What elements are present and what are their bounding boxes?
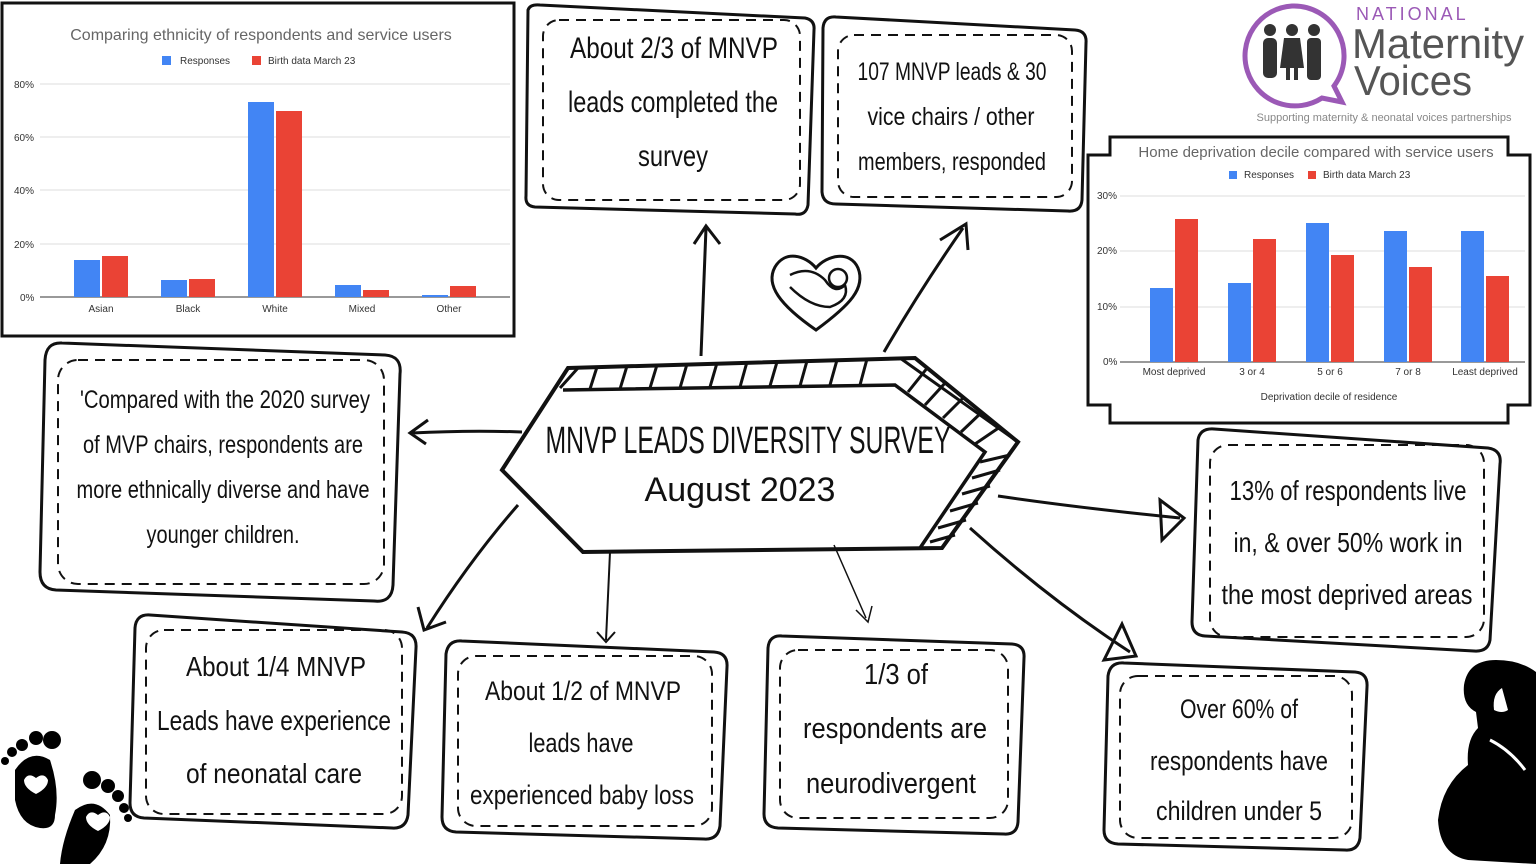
arrows bbox=[410, 224, 1184, 660]
box: 1/4 neonatal: of neonatal care bbox=[186, 758, 362, 789]
chart: ethnicity: Asian bbox=[88, 304, 114, 315]
box: 1/4 neonatal: Leads have experience bbox=[157, 705, 391, 736]
box: 107 leads: 107 MNVP leads & 30 bbox=[858, 58, 1046, 86]
chart: deprivation: Responses bbox=[1244, 170, 1294, 181]
box: 1/3 neurodivergent: 1/3 of bbox=[864, 659, 929, 691]
chart: deprivation: 0% bbox=[1103, 357, 1118, 368]
box: compared with 2020 bbox=[40, 343, 400, 601]
chart: ethnicity: 40% bbox=[14, 186, 34, 197]
chart: deprivation: Birth data March 23 bbox=[1323, 170, 1411, 181]
box: 2/3 completed: About 2/3 of MNVP bbox=[570, 32, 778, 65]
chart: ethnicity: 60% bbox=[14, 133, 34, 144]
box: 107 leads bbox=[822, 17, 1086, 211]
chart: ethnicity: Black bbox=[176, 304, 201, 315]
box: compared with 2020: more ethnically diverse and have bbox=[76, 476, 370, 504]
chart: deprivation: 3 or 4 bbox=[1239, 367, 1265, 378]
box: 13% deprived: the most deprived areas bbox=[1222, 579, 1472, 610]
chart: ethnicity: 20% bbox=[14, 240, 34, 251]
chart: deprivation: 10% bbox=[1097, 302, 1117, 313]
box: 1/3 neurodivergent: neurodivergent bbox=[806, 768, 976, 800]
chart: deprivation: Deprivation decile of residence bbox=[1261, 392, 1398, 403]
center: title hexagon: August 2023 bbox=[645, 471, 835, 509]
chart: ethnicity: Birth data March 23 bbox=[268, 56, 356, 67]
box: 1/2 baby loss bbox=[442, 641, 727, 839]
box: over 60% children under 5 bbox=[1104, 663, 1367, 850]
chart: ethnicity: Comparing ethnicity of respondents and service users bbox=[70, 27, 452, 44]
logo: National Maternity Voices bbox=[1245, 4, 1524, 124]
box: 2/3 completed: survey bbox=[638, 140, 708, 173]
box: over 60% children under 5: children under 5 bbox=[1156, 796, 1322, 826]
chart: ethnicity: White bbox=[262, 304, 288, 315]
box: 2/3 completed: leads completed the bbox=[568, 86, 778, 119]
center: title hexagon bbox=[502, 358, 1018, 552]
box: 107 leads: members, responded bbox=[858, 148, 1046, 176]
box: 1/3 neurodivergent bbox=[764, 636, 1024, 834]
box: over 60% children under 5: respondents have bbox=[1150, 746, 1328, 776]
box: 1/4 neonatal bbox=[130, 615, 416, 828]
chart: deprivation: Least deprived bbox=[1452, 367, 1518, 378]
chart: deprivation: 7 or 8 bbox=[1395, 367, 1421, 378]
box: compared with 2020: of MVP chairs, respondents are bbox=[83, 431, 363, 459]
chart: deprivation: 5 or 6 bbox=[1317, 367, 1343, 378]
logo: National Maternity Voices: NATIONAL bbox=[1356, 4, 1469, 24]
chart: ethnicity: Responses bbox=[180, 56, 230, 67]
icon: heart with baby bbox=[772, 256, 860, 330]
center: title hexagon: MNVP LEADS DIVERSITY SURVEY bbox=[546, 420, 950, 462]
chart: deprivation: Most deprived bbox=[1143, 367, 1205, 378]
box: 13% deprived: 13% of respondents live bbox=[1230, 475, 1466, 506]
box: 2/3 completed bbox=[526, 5, 814, 214]
logo: National Maternity Voices: Maternity bbox=[1352, 20, 1524, 67]
box: over 60% children under 5: Over 60% of bbox=[1180, 694, 1298, 724]
icon: baby feet bbox=[1, 731, 132, 864]
box: 1/2 baby loss: About 1/2 of MNVP bbox=[485, 676, 681, 706]
box: 13% deprived: in, & over 50% work in bbox=[1234, 527, 1462, 558]
chart: ethnicity: 0% bbox=[20, 293, 35, 304]
box: 107 leads: vice chairs / other bbox=[868, 103, 1034, 131]
box: 1/3 neurodivergent: respondents are bbox=[803, 713, 987, 745]
chart: deprivation bbox=[1088, 137, 1530, 423]
logo: National Maternity Voices: Voices bbox=[1354, 57, 1472, 104]
box: compared with 2020: 'Compared with the 2020 survey bbox=[80, 386, 370, 414]
chart: ethnicity: Mixed bbox=[349, 304, 375, 315]
icon: pregnant silhouette bbox=[1438, 660, 1536, 864]
chart: ethnicity bbox=[2, 3, 514, 336]
box: 1/2 baby loss: leads have bbox=[528, 728, 634, 758]
chart: deprivation: 20% bbox=[1097, 246, 1117, 257]
chart: ethnicity: 80% bbox=[14, 80, 34, 91]
chart: deprivation: 30% bbox=[1097, 191, 1117, 202]
box: 1/2 baby loss: experienced baby loss bbox=[470, 780, 694, 810]
box: compared with 2020: younger children. bbox=[146, 521, 300, 549]
logo: National Maternity Voices: Supporting maternity & neonatal voices partnerships bbox=[1257, 112, 1512, 124]
box: 1/4 neonatal: About 1/4 MNVP bbox=[186, 651, 366, 682]
chart: deprivation: Home deprivation decile compared with service users bbox=[1138, 144, 1494, 161]
chart: ethnicity: Other bbox=[436, 304, 462, 315]
box: 13% deprived bbox=[1192, 429, 1500, 651]
